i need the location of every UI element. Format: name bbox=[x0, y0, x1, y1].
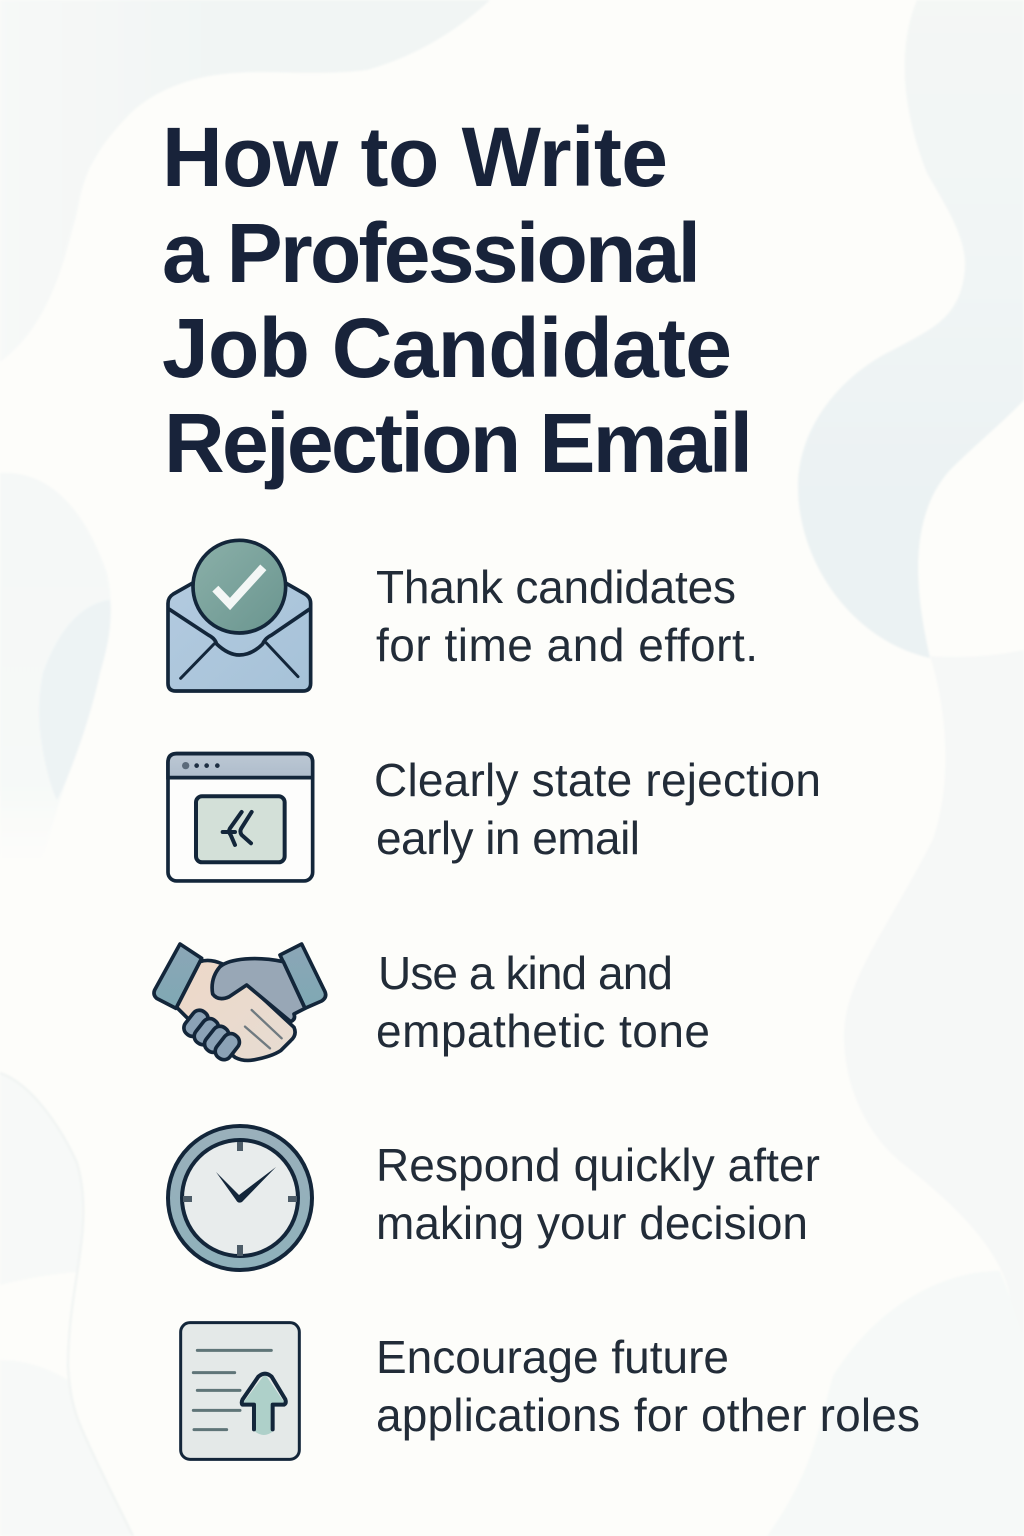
text: encourage future applications: applications for other roles bbox=[376, 1389, 920, 1441]
title: a Professional bbox=[162, 206, 701, 300]
text: kind and empathetic tone: Use a kind and bbox=[378, 947, 673, 999]
title bbox=[162, 110, 753, 490]
title: How to Write bbox=[162, 110, 668, 204]
text: encourage future applications: Encourage future bbox=[376, 1331, 729, 1383]
title: Rejection Email bbox=[164, 396, 753, 490]
text: thank candidates: Thank candidates bbox=[376, 561, 736, 613]
icon: handshake bbox=[154, 944, 326, 1063]
text: kind and empathetic tone: empathetic tone bbox=[376, 1005, 710, 1057]
text: thank candidates bbox=[376, 561, 758, 671]
text: clearly state rejection bbox=[374, 754, 821, 864]
text: encourage future applications bbox=[376, 1331, 920, 1441]
text: kind and empathetic tone bbox=[376, 947, 710, 1057]
text: thank candidates: for time and effort. bbox=[376, 619, 758, 671]
text: clearly state rejection: Clearly state rejection bbox=[374, 754, 821, 806]
icon: envelope with check mark bbox=[168, 540, 311, 691]
icon: browser window bbox=[168, 754, 313, 881]
text: respond quickly: Respond quickly after bbox=[376, 1139, 820, 1191]
icon: document with up arrow bbox=[181, 1323, 299, 1459]
text: respond quickly: making your decision bbox=[376, 1197, 808, 1249]
text: clearly state rejection: early in email bbox=[376, 812, 640, 864]
title: Job Candidate bbox=[162, 301, 732, 395]
icon: clock bbox=[168, 1126, 312, 1270]
text: respond quickly bbox=[376, 1139, 820, 1249]
